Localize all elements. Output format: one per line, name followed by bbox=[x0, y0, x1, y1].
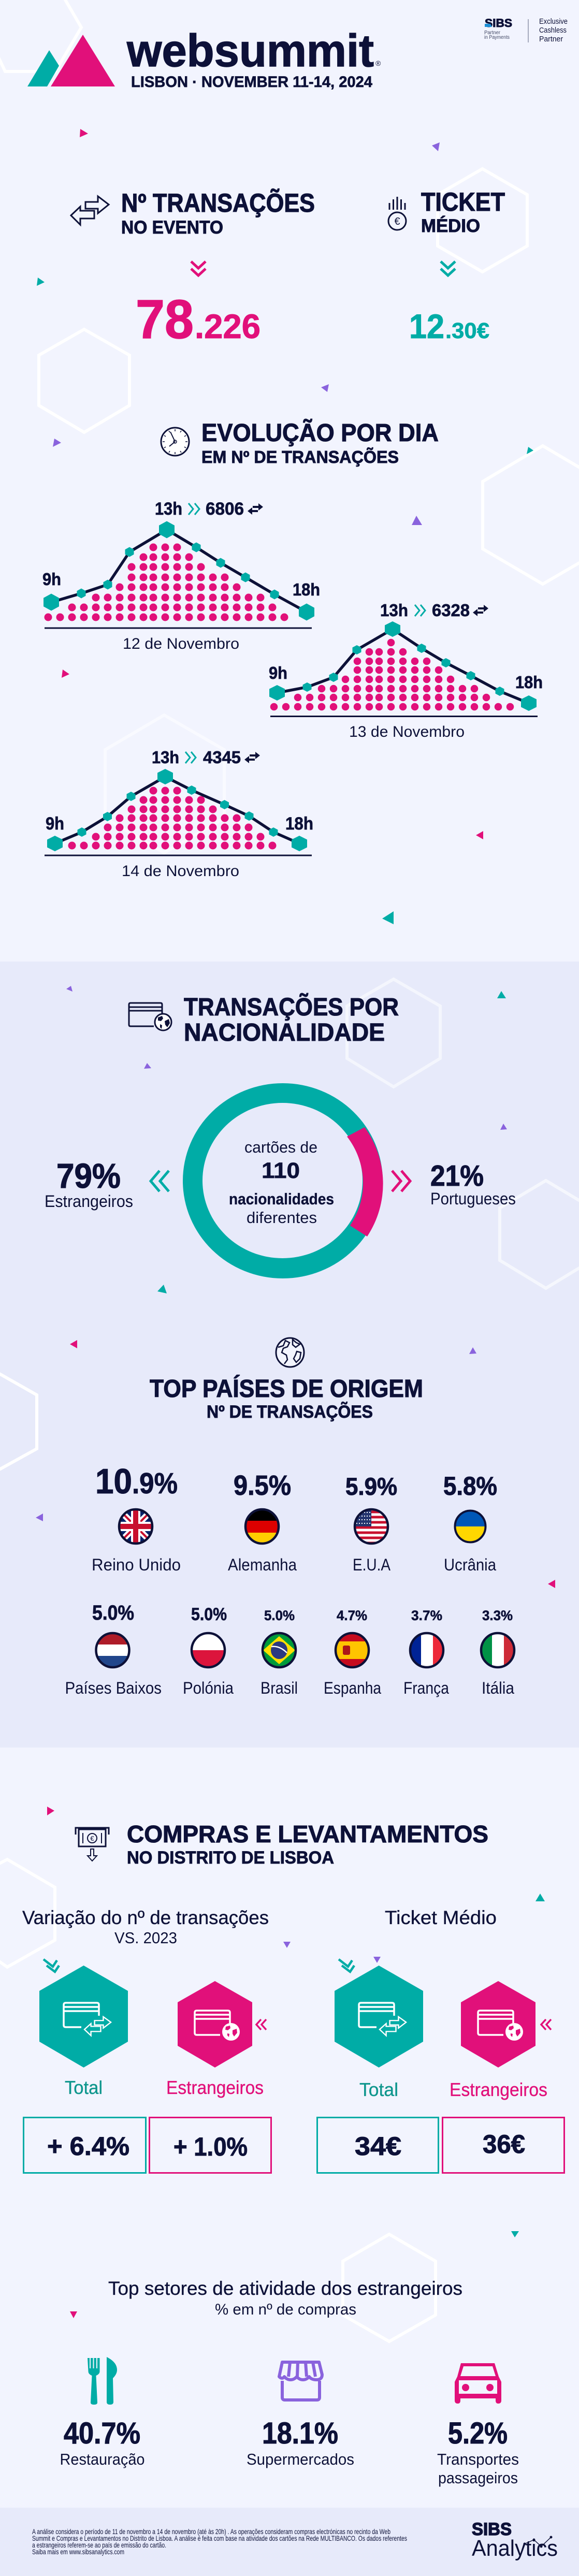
icon: card with globe bbox=[129, 1003, 171, 1030]
subheading: médio: MÉDIO bbox=[421, 215, 480, 236]
stat: 79% estrangeiros: 79% bbox=[56, 1157, 121, 1196]
icon: chevrons left teal bbox=[151, 1171, 169, 1191]
stat box: 34€: 34€ bbox=[355, 2132, 401, 2161]
heading: nacionalidade: NACIONALIDADE bbox=[184, 1019, 385, 1046]
subheading: % em nº de compras: % em nº de compras bbox=[215, 2301, 356, 2318]
country: Itália bbox=[480, 1608, 515, 1697]
icon: chevrons right pink bbox=[392, 1171, 410, 1191]
subheading: em nº de transações: EM Nº DE TRANSAÇÕES bbox=[201, 447, 399, 467]
country: Brasil: 5.0% bbox=[264, 1608, 295, 1623]
donut chart: 110 bbox=[262, 1158, 300, 1183]
stat: transportes passageiros: 5.2% bbox=[448, 2417, 508, 2450]
stat: 79% estrangeiros: Estrangeiros bbox=[45, 1192, 133, 1211]
country: Países Baixos: Países Baixos bbox=[65, 1679, 162, 1697]
chart: 12 de novembro: 13h bbox=[155, 499, 182, 519]
subheading: no distrito de lisboa: NO DISTRITO DE LISBOA bbox=[127, 1848, 334, 1868]
logo: SIBS Analytics bbox=[472, 2520, 558, 2561]
icon: fork and knife bbox=[88, 2357, 117, 2405]
donut chart bbox=[183, 1083, 383, 1278]
icon: exchange arrows bbox=[71, 196, 109, 225]
country: Espanha: Espanha bbox=[324, 1679, 381, 1697]
chart: 14 de novembro: 14 de Novembro bbox=[122, 863, 239, 880]
country: Polónia: 5.0% bbox=[191, 1605, 227, 1624]
stat: 21% portugueses: Portugueses bbox=[430, 1189, 516, 1208]
country: Espanha bbox=[324, 1608, 381, 1697]
panel: evolução por dia bbox=[42, 418, 543, 880]
stat: supermercados: Supermercados bbox=[247, 2450, 354, 2468]
country: Reino Unido: 10 bbox=[95, 1462, 132, 1501]
country: Espanha: 4.7% bbox=[337, 1608, 367, 1623]
chart: 12 de novembro: 18h bbox=[293, 580, 320, 599]
value: 78.226: .226 bbox=[195, 307, 260, 345]
header: SIBS exclusive cashless partner: SIBS bbox=[485, 17, 512, 30]
country: Ucrânia bbox=[443, 1472, 497, 1574]
footnote text: a estrangeiros referem-se ao país de emissão do cartão. bbox=[32, 2541, 166, 2549]
icon: pink chevrons (ticket) bbox=[541, 2019, 551, 2030]
chart: 14 de novembro bbox=[45, 748, 313, 880]
icon: pink chevrons (variação) bbox=[256, 2019, 266, 2030]
icon: chevrons down teal bbox=[441, 261, 455, 275]
icon: globe bbox=[276, 1338, 304, 1367]
heading: Nº transações: Nº TRANSAÇÕES bbox=[121, 188, 315, 217]
subheading: vs. 2023: VS. 2023 bbox=[114, 1929, 177, 1947]
stat: restauração bbox=[60, 2417, 145, 2468]
stat: 79% estrangeiros bbox=[45, 1157, 133, 1211]
chart: 13 de novembro bbox=[269, 601, 543, 740]
country: Reino Unido: Reino Unido bbox=[92, 1555, 181, 1574]
heading: top países de origem: TOP PAÍSES DE ORIGEM bbox=[150, 1375, 423, 1403]
heading: ticket médio: Ticket Médio bbox=[385, 1907, 497, 1928]
chart: 13 de novembro: 6328 bbox=[432, 601, 470, 620]
country: Alemanha: Alemanha bbox=[228, 1555, 297, 1574]
value: 12.30€ bbox=[409, 307, 489, 345]
chart: 14 de novembro: 4345 bbox=[203, 748, 241, 767]
stat box: + 1.0%: + 1.0% bbox=[173, 2132, 248, 2161]
heading: variação do nº de transações: Variação do nº de transações bbox=[22, 1907, 269, 1928]
country: Reino Unido: .9% bbox=[132, 1467, 178, 1500]
label: estrangeiros: Estrangeiros bbox=[166, 2077, 264, 2098]
country: E.U.A: E.U.A bbox=[353, 1555, 391, 1574]
chart: 14 de novembro: 13h bbox=[152, 748, 179, 767]
chart: 13 de novembro: 18h bbox=[515, 673, 543, 692]
heading: compras e levantamentos: COMPRAS E LEVANTAMENTOS bbox=[127, 1821, 488, 1847]
heading: ticket: TICKET bbox=[421, 187, 505, 216]
icon: ATM banknote: € bbox=[90, 1835, 94, 1842]
chart: 12 de novembro bbox=[42, 499, 320, 652]
stat box: + 1.0% bbox=[149, 2118, 271, 2173]
stat box: 36€: 36€ bbox=[483, 2130, 525, 2159]
donut chart: nacionalidades bbox=[229, 1190, 334, 1208]
decorative triangles bbox=[36, 129, 555, 2318]
country: França: França bbox=[403, 1679, 449, 1697]
country: Alemanha: 9.5% bbox=[234, 1470, 291, 1501]
panel: average ticket bbox=[388, 187, 505, 345]
subheading: nº de transações: Nº DE TRANSAÇÕES bbox=[207, 1402, 373, 1422]
country: Ucrânia: 5.8% bbox=[443, 1472, 497, 1501]
stat box: + 6.4%: + 6.4% bbox=[47, 2132, 129, 2161]
country: Polónia: Polónia bbox=[183, 1679, 234, 1697]
header: Web Summit logo: websummit bbox=[126, 25, 374, 76]
header: Web Summit logo: LISBON · NOVEMBER 11-14, 2024 bbox=[131, 74, 372, 91]
country: E.U.A bbox=[345, 1473, 397, 1574]
country: Brasil bbox=[261, 1610, 297, 1694]
panel: top setores de atividade bbox=[60, 2278, 519, 2487]
logo: SIBS Analytics: SIBS bbox=[472, 2520, 512, 2539]
icon: teal chevrons (variação) bbox=[44, 1959, 59, 1972]
icon: ATM banknote bbox=[76, 1828, 109, 1861]
stat: supermercados: 18.1% bbox=[262, 2417, 338, 2450]
stat: 21% portugueses bbox=[430, 1159, 516, 1208]
panel: top países de origem bbox=[65, 1338, 515, 1697]
country: Itália: 3.3% bbox=[482, 1608, 513, 1623]
panel: number of transactions at the event bbox=[71, 188, 315, 350]
country: Países Baixos bbox=[65, 1602, 162, 1697]
stat box: 34€ bbox=[317, 2118, 438, 2173]
country: E.U.A: 5.9% bbox=[345, 1473, 397, 1500]
header: Web Summit logo bbox=[27, 25, 381, 91]
value: 12.30€: 12 bbox=[409, 307, 444, 345]
donut chart: cartões de bbox=[244, 1138, 317, 1156]
chart: 12 de novembro: 12 de Novembro bbox=[123, 635, 239, 652]
header: SIBS exclusive cashless partner: Partner bbox=[539, 35, 563, 43]
header: SIBS exclusive cashless partner: in Payments bbox=[484, 35, 510, 40]
subheading: no evento: NO EVENTO bbox=[121, 217, 223, 238]
heading: evolução por dia: EVOLUÇÃO POR DIA bbox=[201, 418, 439, 447]
country: Reino Unido bbox=[93, 1468, 180, 1571]
stat: transportes passageiros: Transportes bbox=[437, 2450, 519, 2468]
chart: 14 de novembro: 9h bbox=[46, 814, 64, 834]
header: SIBS exclusive cashless partner bbox=[484, 17, 568, 43]
country: França: 3.7% bbox=[411, 1608, 442, 1623]
chart: 14 de novembro: 18h bbox=[285, 814, 313, 834]
stat box: + 6.4% bbox=[24, 2118, 146, 2173]
donut chart: diferentes bbox=[247, 1209, 317, 1227]
footnote text: Summit e Compras e Levantamentos no Distrito de Lisboa. A análise é feita com base na atividade dos cartões na Rede MULTIBANCO. Os dados referentes bbox=[32, 2534, 407, 2542]
label: total ticket: Total bbox=[359, 2079, 398, 2100]
icon: teal hexagon with card and arrows (variação) bbox=[39, 1966, 128, 2068]
value: 78.226 bbox=[136, 289, 260, 350]
chart: 13 de novembro: 9h bbox=[269, 663, 287, 682]
icon: teal hexagon with card and arrows (ticket) bbox=[335, 1966, 423, 2068]
header: SIBS exclusive cashless partner: Cashless bbox=[539, 26, 567, 35]
country: Brasil: Brasil bbox=[260, 1679, 298, 1697]
country: Polónia bbox=[183, 1605, 234, 1697]
logo: SIBS Analytics: Analytics bbox=[472, 2536, 558, 2561]
icon: car bbox=[455, 2363, 501, 2404]
footnote text: A análise considera o período de 11 de novembro a 14 de novembro (até às 20h) . As operações consideram compras electrónicas no recinto da Web bbox=[32, 2527, 390, 2536]
country: França bbox=[403, 1608, 449, 1697]
panel: compras e levantamentos bbox=[22, 1821, 564, 2173]
footer bbox=[32, 2520, 558, 2561]
label: estrangeiros ticket: Estrangeiros bbox=[450, 2079, 547, 2100]
footnote text bbox=[32, 2527, 407, 2556]
icon: chevrons down pink bbox=[191, 261, 206, 275]
country: Itália: Itália bbox=[482, 1679, 514, 1697]
icon: clock bbox=[161, 428, 189, 456]
heading: transações por: TRANSAÇÕES POR bbox=[184, 993, 399, 1021]
chart: 13 de novembro: 13 de Novembro bbox=[349, 723, 465, 740]
stat: restauração: 40.7% bbox=[64, 2417, 140, 2450]
footnote text: Saiba mais em www.sibsanalytics.com bbox=[32, 2548, 124, 2556]
country: Alemanha bbox=[228, 1470, 297, 1574]
chart: 13 de novembro: 13h bbox=[380, 601, 408, 620]
icon: euro coin with bars: € bbox=[394, 216, 400, 227]
stat: transportes passageiros: passageiros bbox=[438, 2469, 518, 2487]
chart: 12 de novembro: 6806 bbox=[206, 499, 244, 519]
icon: pink hexagon with card and globe (variação) bbox=[178, 1981, 252, 2068]
icon: teal chevrons (ticket) bbox=[339, 1959, 354, 1972]
header: Web Summit logo: ® bbox=[375, 59, 381, 67]
stat: 21% portugueses: 21% bbox=[430, 1159, 484, 1192]
stat: restauração: Restauração bbox=[60, 2450, 145, 2468]
heading: top setores: Top setores de atividade dos estrangeiros bbox=[108, 2278, 462, 2299]
country: Países Baixos: 5.0% bbox=[92, 1602, 134, 1624]
icon: store bbox=[279, 2362, 322, 2400]
stat box: 36€ bbox=[442, 2118, 564, 2173]
icon: euro coin with bars bbox=[388, 197, 406, 230]
label: total: Total bbox=[65, 2077, 103, 2098]
stat: transportes passageiros bbox=[437, 2417, 519, 2487]
panel: transações por nacionalidade bbox=[45, 993, 516, 1278]
header: SIBS exclusive cashless partner: Partner bbox=[484, 30, 501, 36]
chart: 12 de novembro: 9h bbox=[42, 570, 61, 589]
header: SIBS exclusive cashless partner: Exclusive bbox=[539, 17, 568, 26]
stat: supermercados bbox=[247, 2417, 354, 2468]
country: Ucrânia: Ucrânia bbox=[444, 1555, 496, 1574]
value: 12.30€: .30€ bbox=[445, 318, 489, 343]
value: 78.226: 78 bbox=[136, 289, 194, 350]
icon: pink hexagon with card and globe (ticket) bbox=[461, 1981, 535, 2068]
